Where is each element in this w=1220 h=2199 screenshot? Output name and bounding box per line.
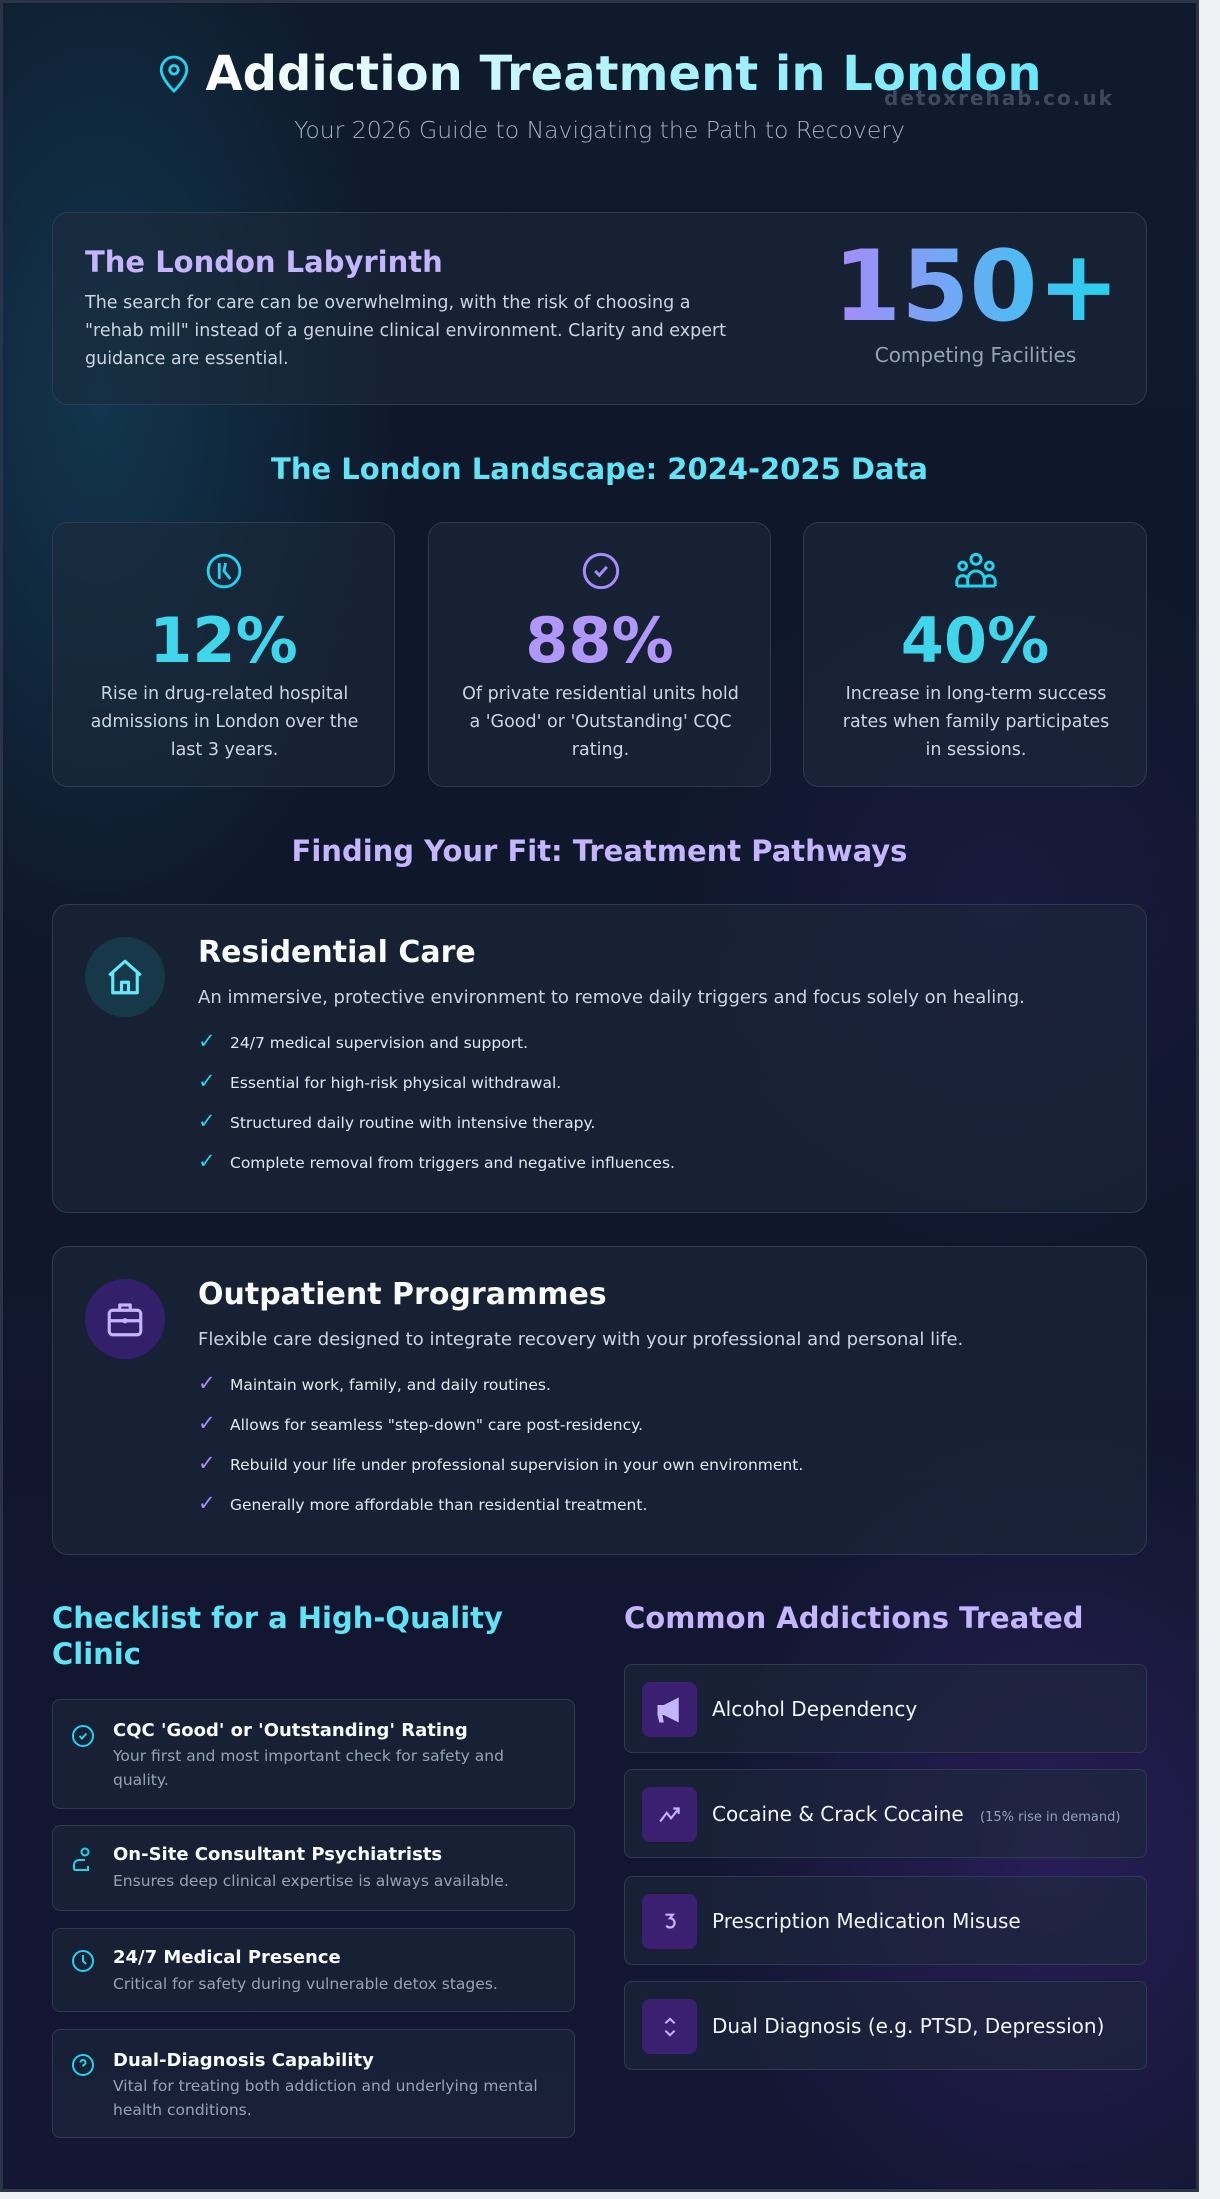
- list: ✓: [198, 1109, 216, 1133]
- addiction card: cocaine: [624, 1769, 1147, 1858]
- list: [198, 1371, 803, 1515]
- panel: residential care: [52, 904, 1147, 1213]
- heading: addictions: Common Addictions Treated: [624, 1601, 1084, 1635]
- checklist card: 24/7: 24/7 Medical Presence: [113, 1947, 341, 1968]
- text block: The search for care can be overwhelming, with the risk of choosing a "rehab mill" instead of a genuine clinical environment. Clarity and expert guidance are essential.: [85, 293, 726, 369]
- list: ✓: [198, 1149, 216, 1173]
- list: Structured daily routine with intensive therapy.: [230, 1114, 595, 1132]
- checklist card: 24/7: Critical for safety during vulnerable detox stages.: [113, 1975, 498, 1993]
- checklist card: CQC: [52, 1699, 575, 1809]
- checklist card: dual diagnosis: Vital for treating both addiction and underlying mental health conditions.: [113, 2077, 538, 2119]
- heading: The London Labyrinth: [85, 245, 443, 279]
- number: 88%: [525, 604, 674, 677]
- stat: 150+: 150+: [833, 230, 1120, 344]
- list: ✓: [198, 1029, 216, 1053]
- heading: checklist: Checklist for a High-Quality Clinic: [52, 1601, 503, 1671]
- panel: outpatient: [52, 1246, 1147, 1555]
- list: 24/7 medical supervision and support.: [230, 1034, 528, 1052]
- checklist card: dual diagnosis: Dual-Diagnosis Capability: [113, 2050, 374, 2071]
- text: Of private residential units hold a 'Good' or 'Outstanding' CQC rating.: [462, 684, 739, 760]
- addiction card: alcohol: [624, 1664, 1147, 1753]
- checklist card: psychiatrists: [52, 1825, 575, 1911]
- checklist card: dual diagnosis: [52, 2029, 575, 2138]
- number: 12%: [149, 604, 298, 677]
- icon: check circle: [582, 552, 620, 590]
- addiction card: alcohol: Alcohol Dependency: [712, 1697, 917, 1721]
- heading: Outpatient Programmes: [198, 1277, 607, 1312]
- watermark: detoxrehab.co.uk: [884, 86, 1114, 110]
- list: ✓: [198, 1491, 216, 1515]
- number: 40%: [901, 604, 1049, 677]
- list: ✓: [198, 1411, 216, 1435]
- panel: stat 88%: [428, 522, 771, 787]
- icon: house: [85, 937, 165, 1017]
- addiction card: dual diagnosis: [624, 1981, 1147, 2070]
- icon: briefcase: [85, 1279, 165, 1359]
- list: ✓: [198, 1451, 216, 1475]
- icon: map pin: [160, 56, 188, 93]
- addiction card: prescription: [624, 1876, 1147, 1965]
- checklist card: CQC: CQC 'Good' or 'Outstanding' Rating: [113, 1720, 468, 1741]
- list: Maintain work, family, and daily routines.: [230, 1376, 551, 1394]
- addiction card: cocaine: Cocaine & Crack Cocaine (15% rise in demand): [712, 1802, 1120, 1826]
- heading: Residential Care: [198, 935, 476, 970]
- checklist card: 24/7: [52, 1928, 575, 2012]
- heading: pathways: Finding Your Fit: Treatment Pathways: [292, 834, 907, 868]
- checklist card: psychiatrists: On-Site Consultant Psychiatrists: [113, 1844, 442, 1865]
- list: Rebuild your life under professional supervision in your own environment.: [230, 1456, 803, 1474]
- list: Generally more affordable than residential treatment.: [230, 1496, 647, 1514]
- list: ✓: [198, 1371, 216, 1395]
- text: Flexible care designed to integrate recovery with your professional and personal life.: [198, 1329, 963, 1350]
- checklist card: CQC: Your first and most important check for safety and quality.: [113, 1747, 504, 1789]
- text: Increase in long-term success rates when family participates in sessions.: [843, 684, 1109, 760]
- list: ✓: [198, 1069, 216, 1093]
- list: Essential for high-risk physical withdrawal.: [230, 1074, 561, 1092]
- panel: stat 40%: [803, 522, 1147, 787]
- icon: gauge: [206, 554, 242, 588]
- list: [198, 1029, 675, 1173]
- text: An immersive, protective environment to remove daily triggers and focus solely on healing.: [198, 987, 1025, 1008]
- addiction card: dual diagnosis: Dual Diagnosis (e.g. PTSD, Depression): [712, 2014, 1104, 2038]
- heading: landscape: The London Landscape: 2024-2025 Data: [271, 452, 928, 486]
- text: Rise in drug-related hospital admissions in London over the last 3 years.: [91, 684, 358, 760]
- list: Complete removal from triggers and negative influences.: [230, 1154, 675, 1172]
- panel: london labyrinth: [52, 212, 1147, 405]
- addiction card: prescription: Prescription Medication Misuse: [712, 1909, 1021, 1933]
- panel: stat 12%: [52, 522, 395, 787]
- stat: 150+: Competing Facilities: [875, 343, 1076, 367]
- subtitle: Your 2026 Guide to Navigating the Path to Recovery: [294, 116, 905, 144]
- icon: users: [955, 552, 997, 588]
- checklist card: psychiatrists: Ensures deep clinical expertise is always available.: [113, 1872, 509, 1890]
- title: Addiction Treatment in London: [205, 46, 1042, 102]
- list: Allows for seamless "step-down" care post-residency.: [230, 1416, 643, 1434]
